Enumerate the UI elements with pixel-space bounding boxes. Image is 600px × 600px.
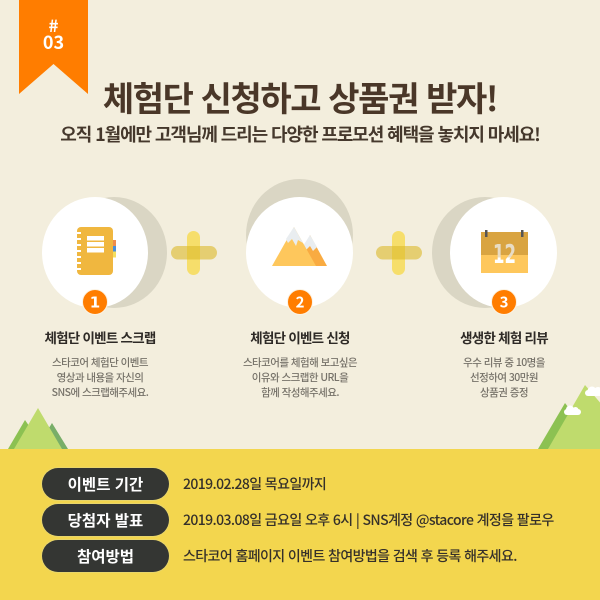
ribbon badge: 03 [43, 29, 64, 55]
plus icon 1 [171, 231, 217, 275]
icon: notebook [77, 227, 116, 275]
step 2 heading: 체험단 이벤트 신청 [250, 327, 350, 347]
mountains left [8, 408, 68, 449]
label: event period [42, 468, 169, 500]
step 1 description: SNS에 스크랩해주세요. [52, 385, 148, 400]
ribbon badge: # [48, 12, 59, 37]
mountains right with clouds [538, 385, 600, 449]
icon: calendar: 12 [493, 240, 516, 270]
number badge 2 [288, 290, 312, 314]
number badge 1: 1 [90, 294, 100, 312]
step 1 heading: 체험단 이벤트 스크랩 [44, 327, 156, 347]
icon: mountains [272, 227, 327, 266]
label: event period: 이벤트 기간 [68, 473, 143, 495]
label: how to join [42, 540, 169, 572]
number badge 3: 3 [500, 292, 508, 312]
label: how to join: 참여방법 [77, 545, 134, 567]
info: winner announcement: 2019.03.08일 금요일 오후 6시 | SNS계정 @stacore 계정을 팔로우 [183, 510, 554, 530]
step 2 description: 스타코어를 체험해 보고싶은 [243, 355, 357, 370]
step 1 circle [42, 197, 167, 314]
number badge 2: 2 [296, 292, 305, 312]
step 1 description: 영상과 내용을 자신의 [57, 370, 143, 385]
ribbon badge [19, 0, 88, 94]
label: winner announcement: 당첨자 발표 [68, 509, 143, 531]
title: 체험단 신청하고 상품권 받자! [103, 72, 497, 121]
step 2 description [243, 355, 357, 400]
info: event period: 2019.02.28일 목요일까지 [183, 474, 326, 494]
label: winner announcement [42, 504, 169, 536]
step 3 description: 우수 리뷰 중 10명을 [463, 355, 545, 370]
bottom info panel [0, 449, 600, 600]
step 1 description [52, 355, 148, 400]
step 2 circle [246, 179, 353, 314]
subtitle: 오직 1월에만 고객님께 드리는 다양한 프로모션 혜택을 놓치지 마세요! [60, 121, 540, 147]
plus icon 2 [376, 231, 422, 275]
step 3 circle [432, 197, 557, 314]
step 3 heading: 생생한 체험 리뷰 [460, 327, 548, 347]
step 1 description: 스타코어 체험단 이벤트 [52, 355, 148, 370]
step 2 description: 이유와 스크랩한 URL을 [252, 370, 348, 385]
step 2 description: 함께 작성해주세요. [261, 385, 339, 400]
step 3 description: 상품권 증정 [480, 385, 528, 400]
info: how to join: 스타코어 홈페이지 이벤트 참여방법을 검색 후 등록 해주세요. [183, 546, 517, 566]
step 3 description: 선정하여 30만원 [470, 370, 538, 385]
step 3 description [463, 355, 545, 400]
